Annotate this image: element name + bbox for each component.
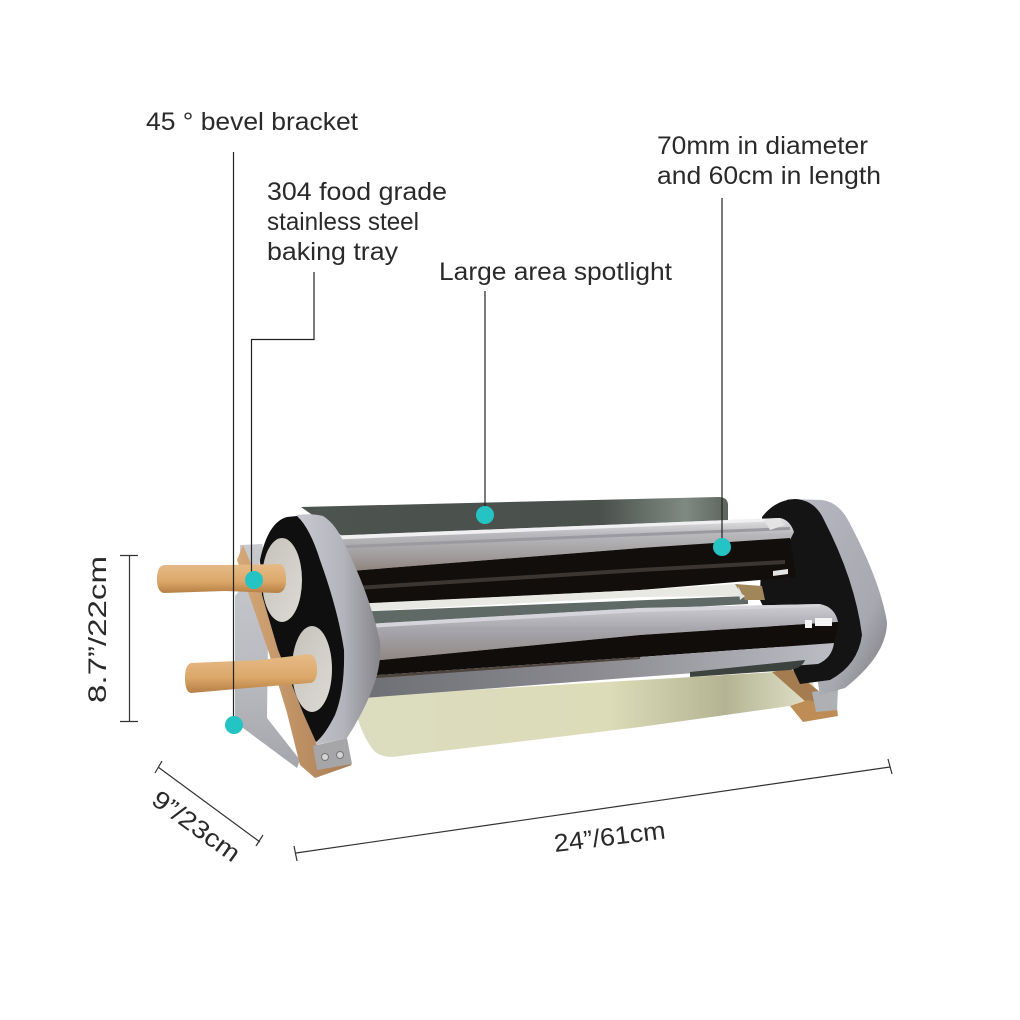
left metal bracket [235, 544, 300, 768]
right end cap [760, 499, 887, 695]
lower steel disc [292, 626, 332, 712]
gap reflection between tubes [350, 584, 765, 625]
dimension: width [294, 759, 892, 861]
label: tube size: 70mm in diameter [657, 132, 868, 160]
dimension: width: 24”/61cm [552, 817, 667, 858]
left cap black panel [260, 516, 344, 742]
upper wooden handle [157, 564, 286, 593]
left mounting plate with bolts [313, 738, 352, 770]
left wood support [237, 545, 352, 778]
dimension: depth [146, 761, 263, 868]
back reflector panel [301, 497, 728, 538]
marker: tube size [713, 538, 731, 556]
label: spotlight: Large area spotlight [439, 258, 672, 286]
leader line: tube size [721, 198, 723, 547]
label: bevel bracket: 45 ° bevel bracket [146, 108, 358, 136]
right wooden foot [772, 668, 838, 722]
solar oven product illustration [157, 497, 887, 778]
marker: baking tray [245, 571, 263, 589]
leader line: baking tray [252, 272, 314, 580]
upper steel disc [262, 538, 302, 622]
label: baking tray: stainless steel [267, 208, 419, 236]
lower reflector panel [352, 670, 818, 757]
dimension: depth: 9”/23cm [146, 785, 245, 868]
label: baking tray: 304 food grade [267, 178, 447, 206]
lower wooden handle [185, 654, 317, 693]
upper tube [325, 518, 796, 605]
dimension: height [84, 555, 138, 722]
leader line: spotlight [484, 291, 486, 515]
marker: bevel bracket [225, 716, 243, 734]
label: baking tray: baking tray [267, 238, 399, 266]
lower tube [350, 604, 838, 699]
right cap silver rim [787, 499, 887, 695]
dimension: height: 8.7”/22cm [84, 556, 112, 703]
label: tube size: and 60cm in length [657, 162, 881, 190]
leader line: bevel bracket [232, 152, 234, 725]
tube highlight chips [738, 518, 788, 600]
marker: spotlight [476, 506, 494, 524]
right cap black panel [760, 499, 862, 684]
left cap silver rim [297, 514, 380, 745]
